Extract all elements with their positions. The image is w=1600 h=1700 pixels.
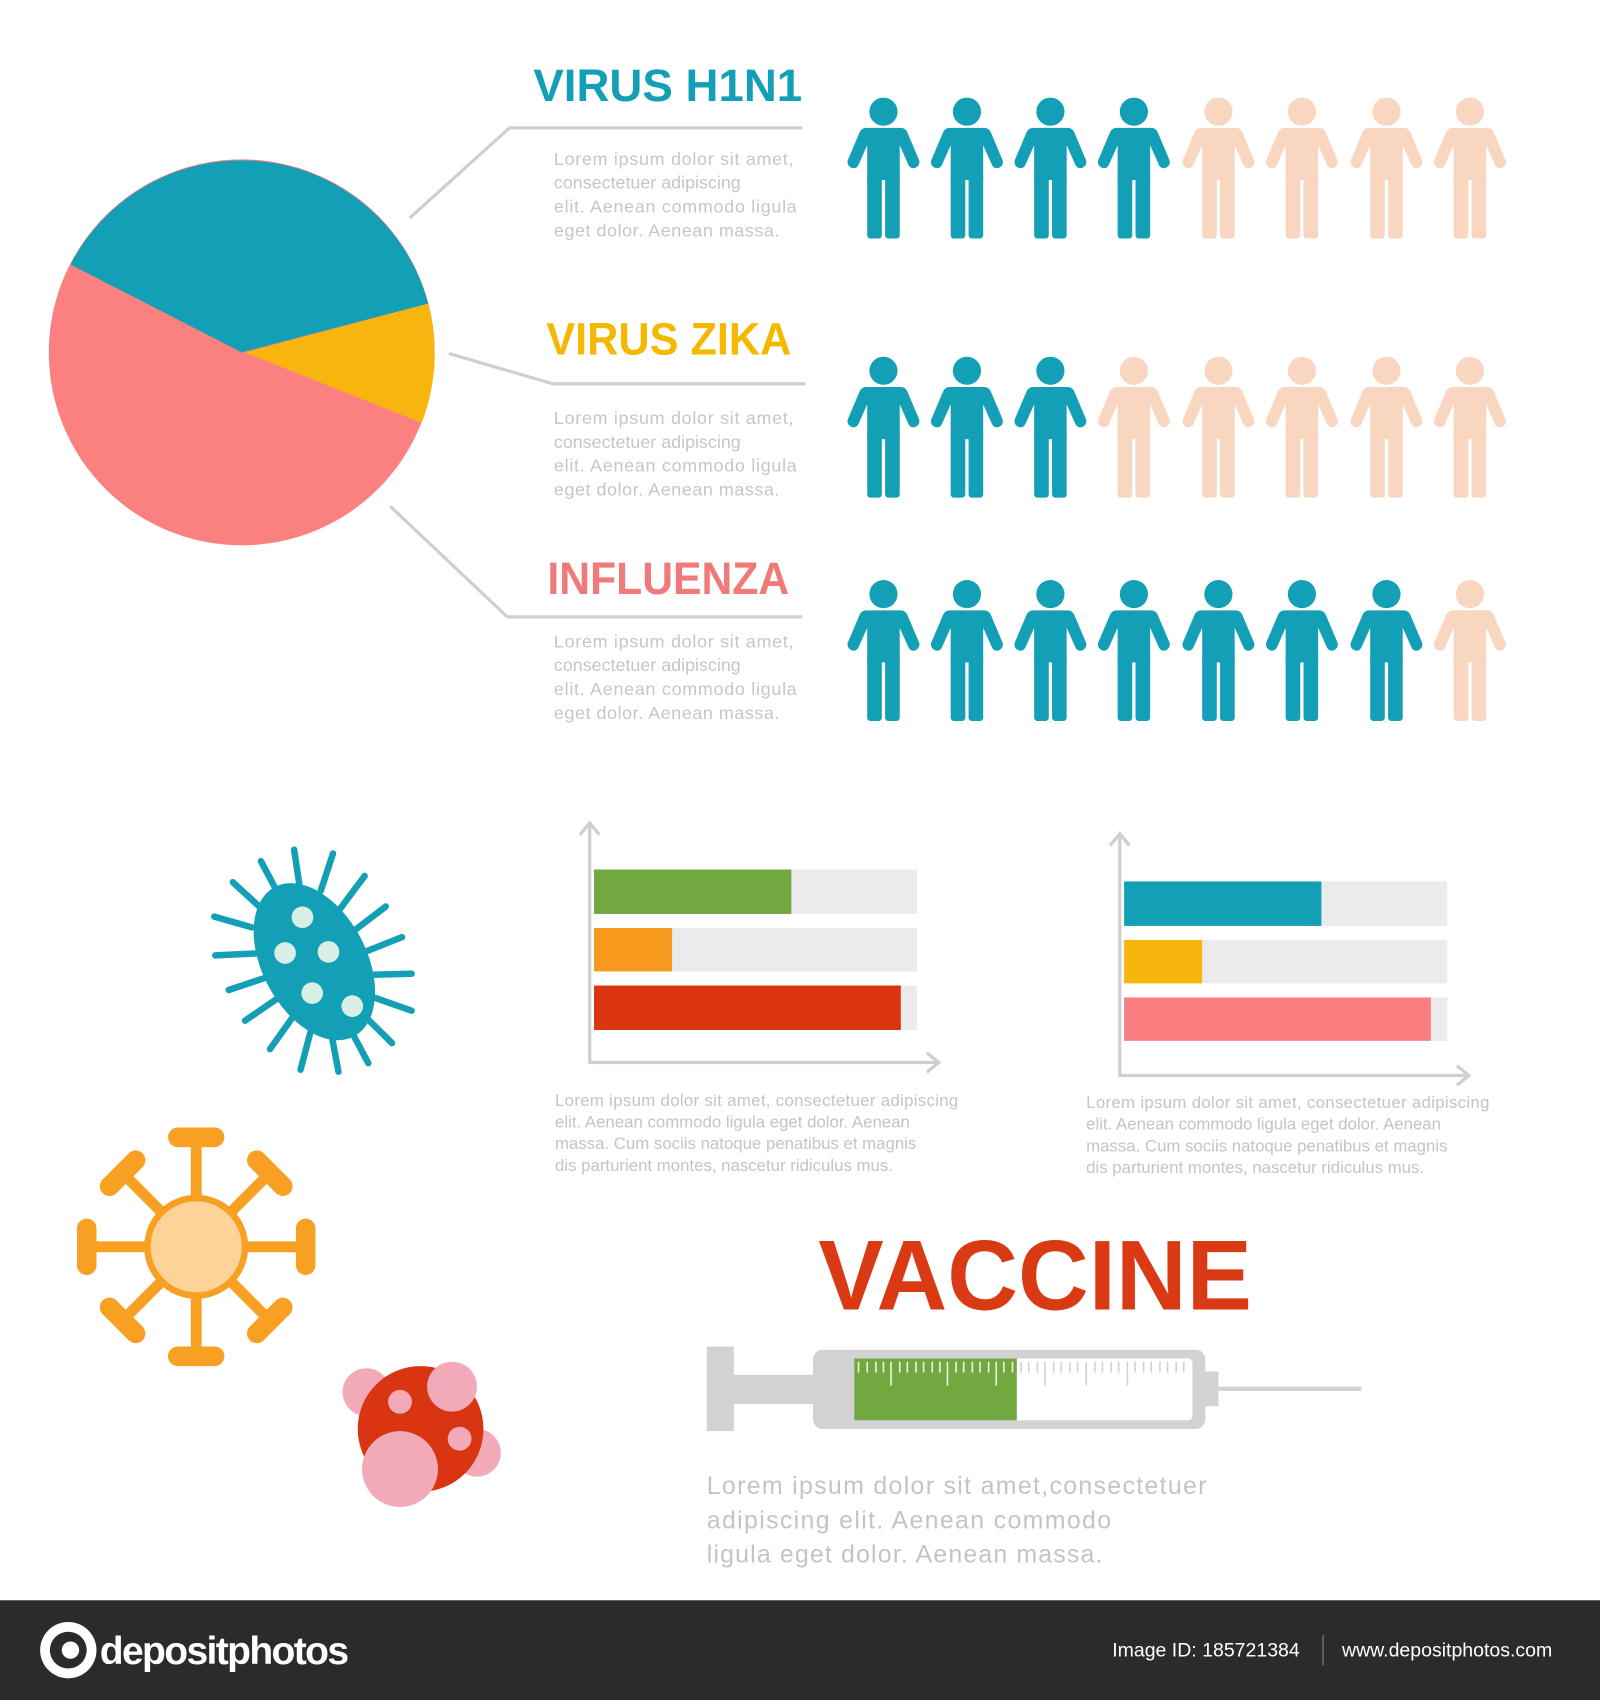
text block: h1n1: Lorem ipsum dolor sit amet, [554,149,793,169]
title: vaccine: VACCINE [818,1221,1252,1332]
heading: virus h1n1: VIRUS H1N1 [533,60,802,111]
icon: red cell [343,1362,501,1507]
footer bar: depositphotos [100,1630,349,1673]
text block: chart 2: dis parturient montes, nascetur ridiculus mus. [1086,1158,1424,1177]
people row: influenza [848,580,1506,721]
bar chart 2 [1110,834,1469,1085]
footer bar: www.depositphotos.com [1341,1640,1552,1662]
bar chart 1 [580,823,939,1072]
text block: chart 2: massa. Cum sociis natoque penatibus et magnis [1086,1136,1447,1155]
text block: zika: elit. Aenean commodo ligula [554,456,797,476]
logo icon [40,1622,96,1678]
connector lines [390,128,805,617]
text block: zika: consectetuer adipiscing [554,432,741,452]
pie chart [49,159,435,545]
text block: vaccine: ligula eget dolor. Aenean massa. [707,1540,1102,1568]
heading: virus zika: VIRUS ZIKA [546,314,791,365]
text block: chart 1: Lorem ipsum dolor sit amet, consectetuer adipiscing [555,1091,958,1110]
people row: zika [848,357,1506,498]
text block: zika: Lorem ipsum dolor sit amet, [554,408,793,428]
heading: influenza: INFLUENZA [547,553,789,604]
icon: orange virus [77,1128,315,1366]
footer bar [0,1600,1600,1700]
icon: syringe [707,1347,1362,1431]
icon: bacterium [182,819,447,1105]
text block: chart 1: massa. Cum sociis natoque penatibus et magnis [555,1134,916,1153]
text block: chart 2: Lorem ipsum dolor sit amet, consectetuer adipiscing [1086,1093,1489,1112]
text block: influenza: elit. Aenean commodo ligula [554,679,797,699]
text block: chart 2: elit. Aenean commodo ligula eget dolor. Aenean [1086,1115,1441,1134]
text block: influenza: eget dolor. Aenean massa. [554,703,779,723]
text block: h1n1: eget dolor. Aenean massa. [554,220,779,240]
text block: h1n1: elit. Aenean commodo ligula [554,196,797,217]
text block: chart 1: elit. Aenean commodo ligula eget dolor. Aenean [555,1113,910,1132]
text block: influenza: consectetuer adipiscing [554,655,741,675]
people row: h1n1 [848,98,1506,239]
text block: h1n1: consectetuer adipiscing [554,173,741,193]
footer bar: Image ID: 185721384 [1112,1640,1300,1662]
text block: chart 1: dis parturient montes, nascetur ridiculus mus. [555,1156,893,1175]
text block: influenza: Lorem ipsum dolor sit amet, [554,631,793,651]
text block: zika: eget dolor. Aenean massa. [554,479,779,499]
text block: vaccine: Lorem ipsum dolor sit amet,consectetuer [707,1472,1207,1500]
text block: vaccine: adipiscing elit. Aenean commodo [707,1507,1111,1535]
